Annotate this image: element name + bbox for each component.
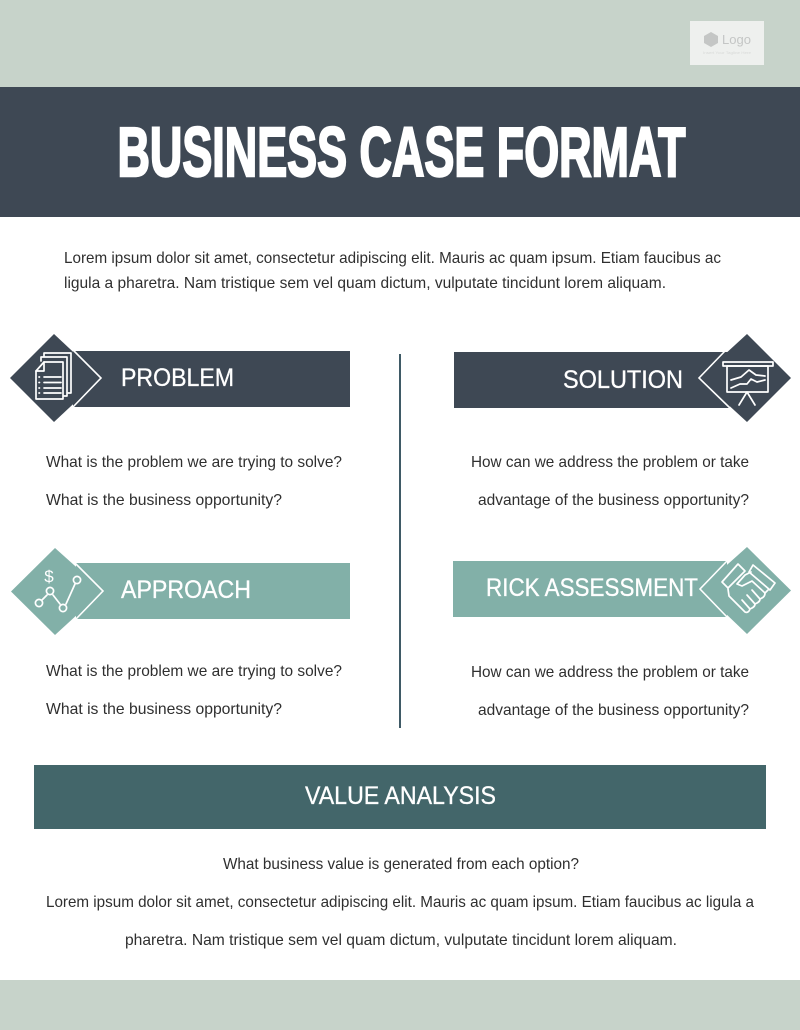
risk assessment questions: advantage of the business opportunity? <box>478 702 749 719</box>
logo placeholder <box>690 21 764 65</box>
panel: solution header: SOLUTION <box>563 366 683 394</box>
solution questions <box>471 454 749 509</box>
icon: handshake <box>722 564 775 612</box>
panel: solution header <box>454 334 791 422</box>
approach questions: What is the problem we are trying to solve? <box>46 663 342 680</box>
logo placeholder: Logo <box>722 32 751 47</box>
panel: problem header: PROBLEM <box>121 364 234 392</box>
panel: approach header: $ <box>44 567 54 586</box>
value analysis banner: VALUE ANALYSIS <box>305 782 496 810</box>
bottom band <box>0 980 800 1030</box>
panel: problem header <box>10 334 350 422</box>
panel: risk assessment header <box>453 547 791 634</box>
panel: approach header <box>11 548 350 635</box>
title banner <box>0 87 800 217</box>
intro text: Lorem ipsum dolor sit amet, consectetur adipiscing elit. Mauris ac quam ipsum. Etiam faucibus ac <box>64 250 721 267</box>
intro text <box>64 250 721 292</box>
logo placeholder: Insert Your Tagline Here <box>703 50 752 55</box>
panel: risk assessment header: RICK ASSESSMENT <box>486 574 698 602</box>
value analysis banner <box>34 765 766 829</box>
value analysis text <box>46 856 754 949</box>
value analysis text: Lorem ipsum dolor sit amet, consectetur adipiscing elit. Mauris ac quam ipsum. Etiam faucibus ac ligula a <box>46 894 754 911</box>
solution questions: How can we address the problem or take <box>471 454 749 471</box>
problem questions: What is the problem we are trying to solve? <box>46 454 342 471</box>
icon: dollar trend chart <box>35 576 81 612</box>
top band <box>0 0 800 87</box>
approach questions <box>46 663 342 718</box>
icon: presentation board <box>723 362 773 405</box>
problem questions <box>46 454 342 509</box>
icon: documents <box>36 353 71 399</box>
value analysis text: pharetra. Nam tristique sem vel quam dictum, vulputate tincidunt lorem aliquam. <box>125 932 677 949</box>
panel: approach header: APPROACH <box>121 576 251 604</box>
value analysis text: What business value is generated from each option? <box>223 856 579 873</box>
problem questions: What is the business opportunity? <box>46 492 282 509</box>
intro text: ligula a pharetra. Nam tristique sem vel quam dictum, vulputate tincidunt lorem aliquam. <box>64 275 666 292</box>
approach questions: What is the business opportunity? <box>46 701 282 718</box>
risk assessment questions: How can we address the problem or take <box>471 664 749 681</box>
solution questions: advantage of the business opportunity? <box>478 492 749 509</box>
risk assessment questions <box>471 664 749 719</box>
